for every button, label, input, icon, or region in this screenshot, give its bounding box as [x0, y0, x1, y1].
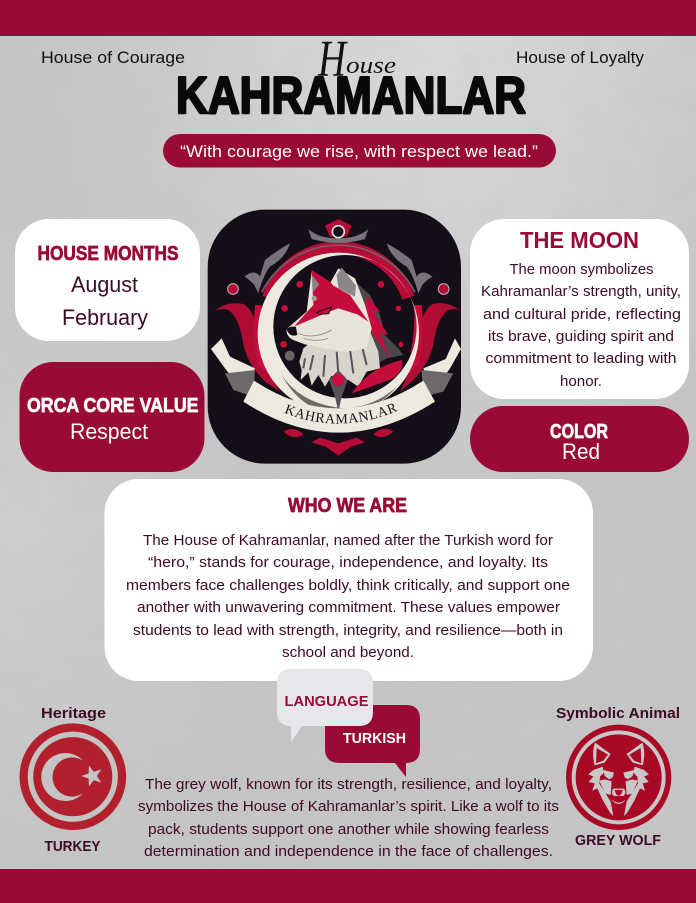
heading: color: COLOR [550, 421, 608, 443]
moon description [481, 261, 681, 390]
wolf description: The grey wolf, known for its strength, resilience, and loyalty, [145, 776, 552, 793]
country label: TURKEY [44, 839, 101, 855]
wolf shoulder ribbon [352, 360, 402, 393]
wolf [287, 268, 403, 387]
who we are description [126, 532, 570, 661]
moon description: commitment to leading with [486, 350, 676, 367]
wolf description: pack, students support one another while showing fearless [148, 821, 549, 838]
heading: the moon: THE MOON [520, 227, 639, 253]
banner tails [211, 338, 255, 392]
who we are description: The House of Kahramanlar, named after the Turkish word for [143, 532, 553, 549]
moon description: The moon symbolizes [510, 261, 654, 278]
who we are description: students to lead with strength, integrity, and resilience—both in [133, 622, 563, 639]
speech bubble: language [277, 669, 373, 742]
speech bubble: turkish: TURKISH [343, 731, 406, 747]
moon description: and cultural pride, reflecting [483, 306, 681, 323]
symbolic animal label: Symbolic Animal [556, 706, 680, 722]
icon: turkish flag [20, 723, 126, 830]
month: august: August [71, 272, 138, 297]
title script word: ouse [346, 53, 396, 79]
wolf description [138, 776, 559, 860]
bottom flourish [312, 438, 365, 456]
banner text: KAHRAMANLAR [284, 404, 398, 424]
title [176, 31, 526, 125]
wolf forehead [294, 270, 368, 327]
heading: who we are: WHO WE ARE [288, 495, 407, 517]
panel: who we are [104, 479, 593, 681]
panel: orca core value [20, 362, 204, 472]
moon description: honor. [560, 373, 602, 390]
who we are description: “hero,” stands for courage, independence, and loyalty. Its [148, 554, 548, 571]
amulet [329, 370, 348, 412]
tagline right: House of Loyalty [516, 48, 644, 67]
speech bubble: language: LANGUAGE [284, 694, 369, 710]
wolf mane back [350, 282, 403, 368]
month: february: February [62, 305, 148, 330]
quote pill: “With courage we rise, with respect we lead.” [180, 142, 538, 161]
quote pill [163, 134, 556, 168]
wolf description: symbolizes the House of Kahramanlar’s spirit. Like a wolf to its [138, 798, 559, 815]
side ribbons [214, 303, 280, 392]
who we are description: members face challenges boldly, think critically, and support one [126, 577, 570, 594]
title main word: KAHRAMANLAR [176, 67, 526, 125]
heading: house months: HOUSE MONTHS [38, 243, 178, 265]
top crest [308, 229, 368, 243]
logo emblem [208, 210, 461, 464]
title script word [317, 31, 396, 88]
who we are description: school and beyond. [282, 644, 414, 661]
crescent moon [258, 253, 419, 414]
red top arc [268, 248, 408, 298]
moon description: Kahramanlar’s strength, unity, [481, 283, 681, 300]
wolf head [287, 268, 372, 352]
panel: the moon [470, 219, 689, 399]
tagline left: House of Courage [41, 48, 185, 67]
heading: orca core value: ORCA CORE VALUE [27, 394, 198, 417]
moon description: its brave, guiding spirit and [488, 328, 674, 345]
heritage column [20, 706, 126, 855]
dial dots [280, 281, 404, 348]
rose ornaments [228, 284, 238, 294]
wolf chest fur [299, 322, 380, 387]
heritage label: Heritage [41, 706, 106, 722]
speech bubble: turkish [325, 705, 420, 777]
icon: wolf badge [566, 725, 671, 830]
panel: color [470, 406, 689, 472]
value: respect: Respect [70, 419, 148, 444]
bottom band [0, 869, 696, 903]
panel: house months [15, 219, 200, 341]
value: red: Red [562, 439, 600, 464]
name banner [243, 381, 435, 433]
animal name: GREY WOLF [575, 833, 661, 849]
symbolic animal column [556, 706, 680, 849]
wolf description: determination and independence in the face of challenges. [144, 843, 553, 860]
top band [0, 0, 696, 36]
logo background [208, 210, 461, 464]
who we are description: another with unwavering commitment. These values empower [137, 599, 560, 616]
title script word: H [317, 31, 348, 88]
scroll ornaments [244, 243, 432, 293]
